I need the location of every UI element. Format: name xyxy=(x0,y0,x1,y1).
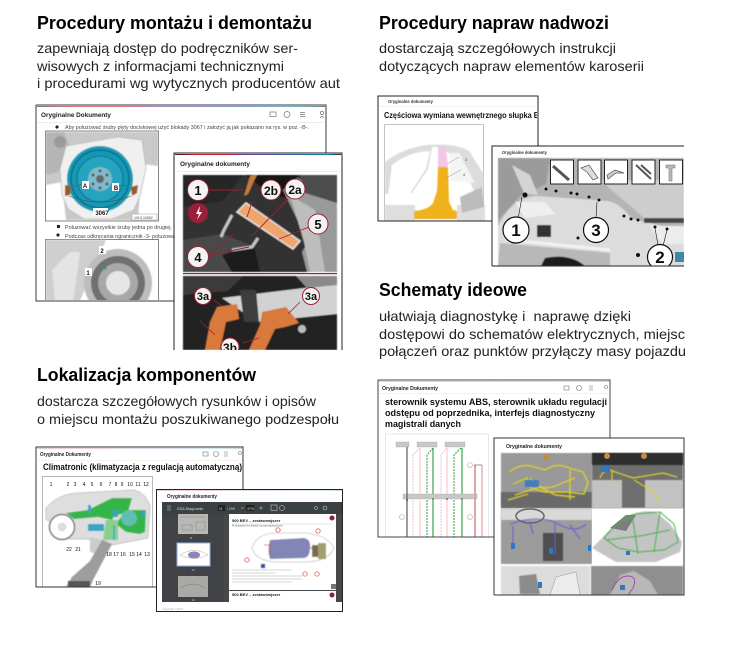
panel title: Oryginalne dokumenty xyxy=(167,494,217,500)
text block: montaż description: wisowych z informacjami technicznymi xyxy=(36,58,284,74)
panel: wiring harness photos screenshot xyxy=(494,438,684,595)
photo: purple harness, dashboard xyxy=(501,509,592,564)
heading: Procedury napraw nadwozi: Procedury napraw nadwozi xyxy=(379,13,609,33)
bullet list: Poluzować wszystkie śruby jedna po drugiej. xyxy=(65,225,172,231)
text block: schematy description: połączeń oraz punktów przyłączy masy pojazdu xyxy=(379,343,686,359)
panel: body shell repair screenshot xyxy=(492,146,684,270)
diagram: dashboard components: 22 xyxy=(66,547,72,553)
panel: B-pillar repair screenshot xyxy=(378,96,539,224)
diagram: dashboard components: 17 xyxy=(113,552,119,558)
illustration: clutch: 1 xyxy=(86,271,90,277)
photo: body shell: 2 xyxy=(655,248,665,267)
panel title: Oryginalne dokumenty xyxy=(506,444,562,450)
PDF page: 500 BEV vehicle layout xyxy=(224,514,342,602)
photo: green harness, car xyxy=(592,509,683,564)
panel heading: odstępu od poprzednika, interfejs diagnostyczny xyxy=(385,408,596,418)
diagram: dashboard components: 7 xyxy=(109,482,112,488)
illustration: car body with yellow pillar: 3 xyxy=(465,158,467,162)
toolbar icons xyxy=(564,386,608,390)
illustration: car body with yellow pillar: 4 xyxy=(463,173,465,177)
diagram: dashboard components: 11 xyxy=(135,482,141,488)
panel border xyxy=(156,490,342,612)
panel: PDF viewer screenshot xyxy=(156,489,343,612)
tool icons row xyxy=(550,160,682,184)
illustration: flywheel: 1913-10562 xyxy=(134,216,153,220)
PDF page: 500 BEV vehicle layout: 500 BEV – zestawowjszer xyxy=(232,592,281,597)
bullet list: Podczas odkręcania ogranicznik -3- poluzowa xyxy=(65,234,175,240)
panel: wiring diagram screenshot xyxy=(378,380,610,544)
PDF page: 500 BEV vehicle layout: 500 BEV – zestawowjszer xyxy=(232,518,281,523)
panel border xyxy=(494,438,684,595)
toolbar icons xyxy=(270,111,324,118)
text block: lokalizacja description: o miejscu montażu poszukiwanego podzespołu xyxy=(37,411,339,427)
photo: body shell: 3 xyxy=(591,221,601,240)
toolbar icons xyxy=(203,452,242,456)
icon: warning bolt xyxy=(188,203,208,223)
PDF thumbnails sidebar: 13 xyxy=(191,598,195,602)
photo: orange brackets: 3b xyxy=(223,341,237,355)
photo: engine bay with numbered parts xyxy=(183,175,337,272)
PDF toolbar: 47% xyxy=(247,507,254,511)
illustration: flywheel: 3067 xyxy=(95,211,109,217)
diagram: dashboard components: 10 xyxy=(127,482,133,488)
panel: flywheel manual screenshot xyxy=(36,105,326,317)
text block: montaż description xyxy=(36,40,340,91)
diagram: dashboard components: 15 xyxy=(129,552,135,558)
diagram: dashboard components: 19 xyxy=(95,581,101,587)
text block: montaż description: i procedurami wg wytycznych producentów aut xyxy=(37,75,340,91)
panel title: Oryginalne Dokumenty xyxy=(40,452,92,458)
diagram: dashboard components: 4 xyxy=(83,482,86,488)
text block: schematy description: ułatwiają diagnostykę i naprawę dzięki xyxy=(379,308,631,324)
PDF toolbar: / 295 xyxy=(227,507,235,511)
heading: Lokalizacja komponentów: Lokalizacja komponentów xyxy=(37,365,257,385)
diagram: dashboard components: 8 xyxy=(115,482,118,488)
bullet list xyxy=(56,225,175,240)
panel title: Oryginalne Dokumenty xyxy=(382,386,438,392)
photo: orange brackets: 3a xyxy=(305,291,318,303)
diagram: dashboard components: 6 xyxy=(100,482,103,488)
PDF toolbar: 11 xyxy=(219,507,223,511)
diagram: dashboard components xyxy=(42,476,152,588)
text block: montaż description: zapewniają dostęp do podręczników ser- xyxy=(37,40,298,56)
bullet instruction: Aby poluzować śruby płyty dociskowej użyć blokady 3067 i założyć ją jak pokazano na rys. w poz. -B-. xyxy=(65,125,309,131)
panel title: Oryginalne dokumenty xyxy=(388,99,433,104)
panel border xyxy=(378,380,610,537)
diagram: dashboard components: 12 xyxy=(143,482,149,488)
panel: PDF viewer screenshot: Copyright ©2023 xyxy=(162,607,183,611)
photo: yellow harness, cabin xyxy=(501,453,592,508)
illustration: flywheel: B xyxy=(114,186,119,192)
PDF thumbnails sidebar xyxy=(162,514,224,602)
photo: body shell xyxy=(498,158,684,270)
photo: engine bay with numbered parts: 1 xyxy=(194,183,202,198)
text block: lokalizacja description xyxy=(37,393,339,427)
diagram: dashboard components: 14 xyxy=(136,552,142,558)
panel border xyxy=(378,96,538,221)
illustration: flywheel xyxy=(46,131,158,221)
illustration: clutch xyxy=(45,239,159,300)
photo: engine bay with numbered parts: 4 xyxy=(194,250,202,265)
illustration: flywheel: A xyxy=(83,184,88,190)
diagram: dashboard components: 3 xyxy=(74,482,77,488)
photo: engine bay with numbered parts: 2b xyxy=(264,184,278,198)
PDF thumbnails sidebar: 11 xyxy=(189,536,193,540)
PDF toolbar: DSA Diagnostic xyxy=(177,507,203,511)
diagram: dashboard components: 16 xyxy=(120,552,126,558)
illustration: car body with yellow pillar xyxy=(384,124,485,224)
panel title: Oryginalne Dokumenty xyxy=(41,113,112,119)
panel border xyxy=(36,105,326,301)
heading: Procedury montażu i demontażu: Procedury montażu i demontażu xyxy=(37,13,312,33)
panel heading: Climatronic (klimatyzacja z regulacją automatyczną) xyxy=(43,462,242,472)
heading: Schematy ideowe: Schematy ideowe xyxy=(379,280,527,300)
photo: orange brackets: 3a xyxy=(197,291,210,303)
photo: purple harness close-up xyxy=(591,566,683,595)
diagram: dashboard components: 1 xyxy=(50,482,53,488)
diagram: dashboard components: 2 xyxy=(67,482,70,488)
diagram: dashboard components: 21 xyxy=(75,547,81,553)
panel border xyxy=(492,146,684,266)
text block: lokalizacja description: dostarcza szczegółowych rysunków i opisów xyxy=(37,393,317,409)
diagram: dashboard components: 9 xyxy=(121,482,124,488)
panel title: Oryginalne dokumenty xyxy=(502,150,547,155)
text block: naprawy description: dostarczają szczegółowych instrukcji xyxy=(379,40,616,56)
panel heading: sterownik systemu ABS, sterownik układu regulacji xyxy=(385,397,607,407)
photo: component close-up xyxy=(501,566,590,595)
diagram: dashboard components: 13 xyxy=(144,552,150,558)
panel border xyxy=(36,447,243,587)
text block: schematy description xyxy=(379,308,686,359)
text block: naprawy description: dotyczących napraw elementów karoserii xyxy=(379,58,644,74)
panel heading: Częściowa wymiana wewnętrznego słupka B xyxy=(384,110,539,120)
PDF toolbar xyxy=(162,502,342,514)
PDF page: 500 BEV vehicle layout: Przedstawienie układów wysokonapięciowych xyxy=(232,524,283,528)
photo: body shell: 1 xyxy=(511,221,521,240)
panel heading xyxy=(385,397,607,429)
panel: photo manual screenshot xyxy=(174,153,342,356)
panel: Climatronic screenshot xyxy=(36,447,243,588)
text block: schematy description: dostępowi do schematów elektrycznych, miejsc xyxy=(379,326,685,342)
photo: engine bay with numbered parts: 5 xyxy=(314,217,322,232)
panel title: Oryginalne dokumenty xyxy=(180,162,251,168)
illustration: clutch: 2 xyxy=(100,249,104,255)
text block: naprawy description xyxy=(379,40,644,74)
diagram: dashboard components: 18 xyxy=(106,552,112,558)
photo: orange brackets xyxy=(183,276,337,356)
PDF thumbnails sidebar: 12 xyxy=(191,568,195,572)
diagram: dashboard components: 5 xyxy=(91,482,94,488)
panel border xyxy=(174,153,342,350)
photo: engine bay with numbered parts: 2a xyxy=(288,183,302,197)
chart: wiring schematic xyxy=(386,434,488,544)
panel heading: magistrali danych xyxy=(385,419,461,429)
photo: yellow harness, dashboard xyxy=(592,453,683,508)
